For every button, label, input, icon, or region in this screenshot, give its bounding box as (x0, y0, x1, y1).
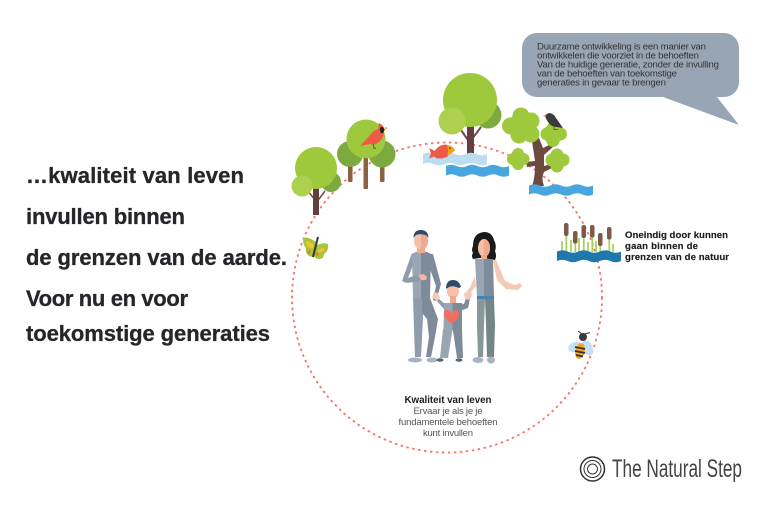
icon: cardinal (360, 123, 388, 148)
icon: pond blue water (446, 165, 509, 177)
text: nature boundaries: grenzen van de natuur (625, 252, 729, 263)
callout: sustainable development definition: Van de huidige generatie, zonder de invulling (537, 60, 719, 70)
figure: child (432, 280, 472, 362)
text: quality of life: Ervaar je als je je (414, 406, 482, 417)
text: quality of life: fundamentele behoeften (398, 417, 498, 428)
icon: oak tree (502, 108, 570, 186)
figure: father (402, 230, 441, 362)
figure: mother (465, 232, 522, 364)
icon: blackbird (543, 113, 563, 130)
text: quality of life: kunt invullen (423, 428, 473, 439)
icon: large tree (438, 73, 502, 154)
dashed boundary circle (292, 142, 602, 452)
callout: sustainable development definition: van de behoeften van toekomstige (537, 68, 677, 80)
text: quality of life (398, 395, 498, 439)
icon: oak water (529, 184, 593, 196)
callout: sustainable development definition: ontwikkelen die voorziet in de behoeften (537, 50, 699, 62)
icon: left tree (292, 147, 341, 215)
icon: bee (567, 331, 595, 360)
heading: main statement: Voor nu en voor (26, 286, 188, 311)
icon: cattails (557, 223, 621, 262)
callout: sustainable development definition: generaties in gevaar te brengen (537, 78, 666, 88)
icon: tree group (337, 120, 396, 189)
heading: main statement: de grenzen van de aarde. (26, 245, 287, 270)
heading: main statement: toekomstige generaties (26, 321, 270, 346)
heading: main statement: invullen binnen (26, 204, 185, 229)
heading: main statement: …kwaliteit van leven (26, 163, 244, 188)
text: nature boundaries (625, 230, 729, 263)
text: nature boundaries: gaan binnen de (625, 241, 698, 252)
icon: fish (429, 144, 455, 158)
icon: butterfly (303, 237, 328, 259)
callout: sustainable development definition: Duurzame ontwikkeling is een manier van (537, 42, 706, 52)
illustration: family (402, 230, 522, 364)
heading: main statement (26, 163, 287, 346)
callout: sustainable development definition (522, 33, 739, 125)
text: quality of life: Kwaliteit van leven (404, 395, 492, 406)
logo: The Natural Step (580, 455, 742, 483)
icon: pond light water (423, 153, 487, 165)
text: nature boundaries: Oneindig door kunnen (625, 230, 728, 241)
